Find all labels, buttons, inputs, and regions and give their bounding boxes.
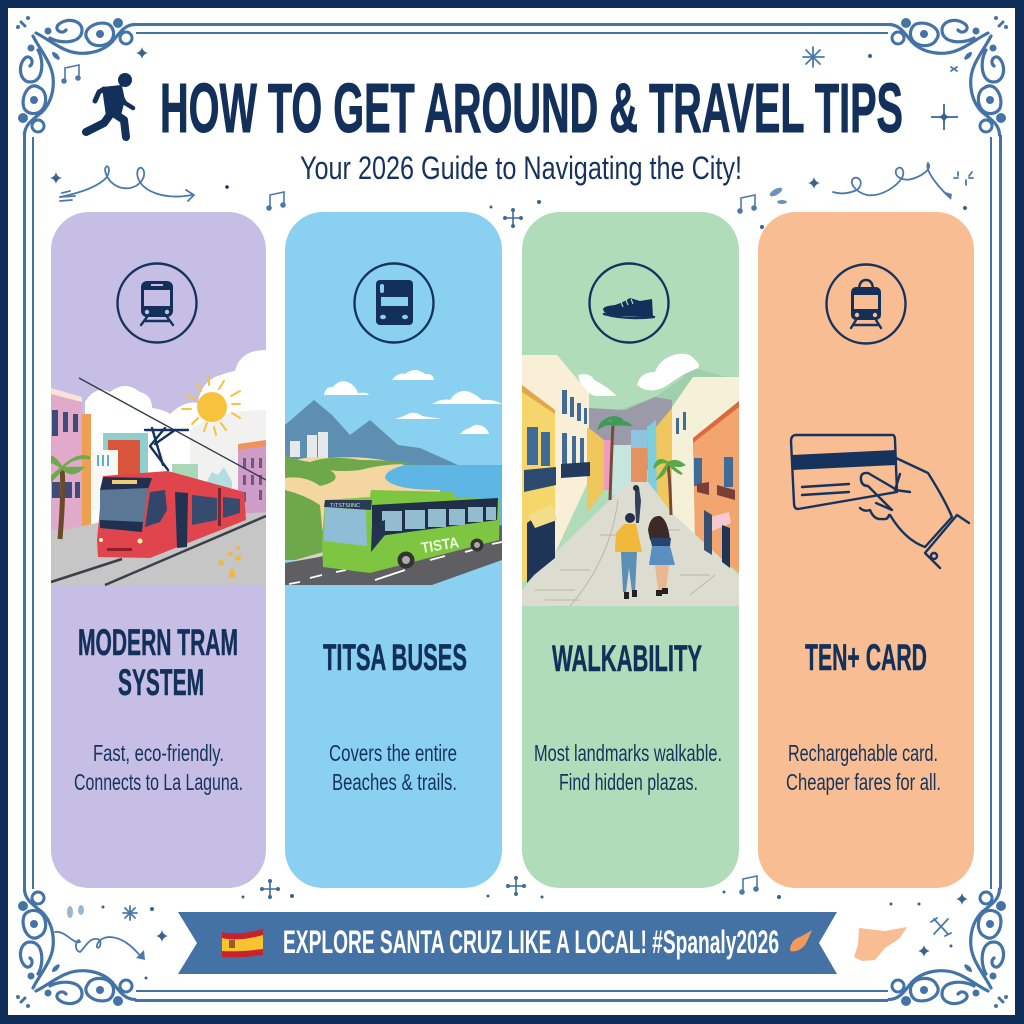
text: bus description: Covers the entire [329, 740, 457, 766]
heading: walkability: WALKABILITY [552, 638, 702, 679]
heading: modern tram system: MODERN TRAM [78, 622, 238, 663]
illustration: green bus on coastal road: TISTA [420, 534, 460, 557]
ornament: bottom left corner [16, 889, 135, 1008]
heading: ten+ card: TEN+ CARD [805, 637, 927, 678]
text: card description: Cheaper fares for all. [786, 769, 941, 795]
illustration: green bus on coastal road: TITSTSIINC [330, 503, 360, 509]
text: tram description [74, 740, 243, 795]
icon: island leaf [790, 930, 812, 951]
icon: spanish flag [222, 929, 263, 957]
text: card description: Rechargehable card. [788, 740, 938, 766]
icon: bus in circle [354, 264, 434, 342]
heading: modern tram system: SYSTEM [118, 662, 204, 703]
heading: modern tram system [78, 622, 238, 703]
text: walkability description [534, 740, 722, 795]
text: bus description: Beaches & trails. [332, 769, 457, 795]
panel: walkability [522, 212, 739, 888]
illustration: colourful pedestrian street [522, 350, 739, 606]
panel: ten+ card [758, 212, 974, 888]
ornament: top left corner [16, 16, 135, 135]
illustration: green bus on coastal road [285, 370, 502, 585]
panel: titsa buses [285, 212, 502, 888]
subtitle: Your 2026 Guide to Navigating the City! [300, 150, 742, 186]
text: card description [786, 740, 941, 795]
text: tram description: Fast, eco-friendly. [93, 740, 224, 766]
text: walkability description: Most landmarks walkable. [534, 740, 722, 766]
text: walkability description: Find hidden plazas. [559, 769, 698, 795]
ornament: top right corner [889, 16, 1008, 135]
text: bus description [329, 740, 457, 795]
heading: titsa buses: TITSA BUSES [323, 637, 467, 678]
text: tram description: Connects to La Laguna. [74, 769, 243, 795]
doodles: header area [50, 47, 973, 229]
icon: hand holding card [791, 435, 969, 568]
panel: modern tram system [40, 212, 270, 888]
icon: walking person [86, 73, 133, 137]
icon: tram in circle [826, 264, 906, 344]
doodles: footer area [55, 876, 968, 980]
illustration: red tram on city street [40, 350, 270, 585]
ornament: bottom right corner [889, 889, 1008, 1008]
icon: shoe in circle [590, 264, 668, 342]
icon: tram in circle [118, 264, 196, 342]
icon: island map [854, 927, 907, 961]
banner ribbon [178, 912, 837, 974]
